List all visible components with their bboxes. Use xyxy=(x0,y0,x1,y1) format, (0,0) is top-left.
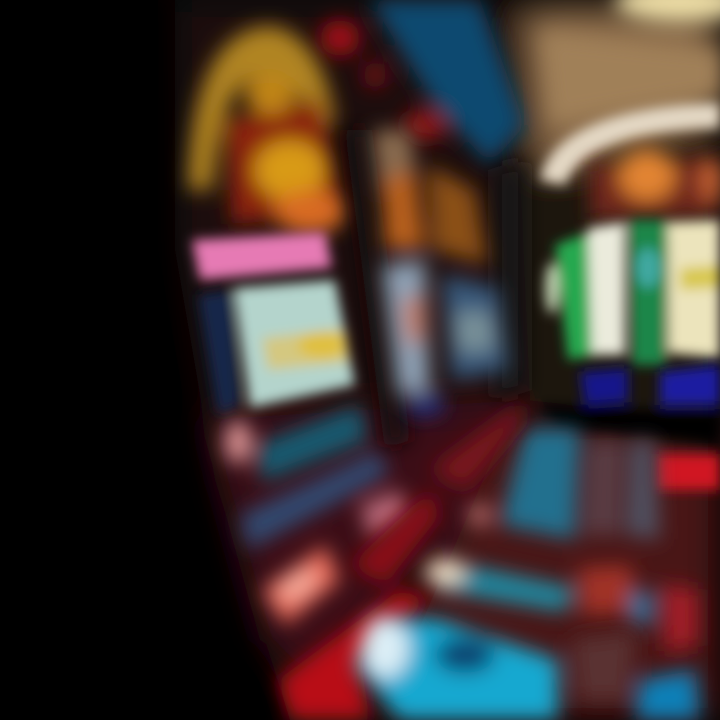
right machine topper xyxy=(590,149,720,220)
left machine topper xyxy=(188,26,346,234)
right machine arch xyxy=(540,103,720,185)
left machine screen xyxy=(198,280,355,415)
left black shadow edge xyxy=(0,0,278,720)
floor red carpet xyxy=(278,400,525,720)
floor blue tiles xyxy=(425,428,698,652)
background wash xyxy=(175,0,720,720)
left machine lower panels xyxy=(225,405,410,625)
left machine pink bar xyxy=(192,232,332,280)
ceiling and upper lights xyxy=(320,0,720,165)
divider between machines xyxy=(345,130,525,450)
right machine blue band xyxy=(540,365,720,445)
floor bright cyan tile xyxy=(355,615,700,720)
right machine green and white reels xyxy=(545,220,720,365)
red panel at right edge xyxy=(655,454,720,490)
middle machine xyxy=(372,130,508,418)
